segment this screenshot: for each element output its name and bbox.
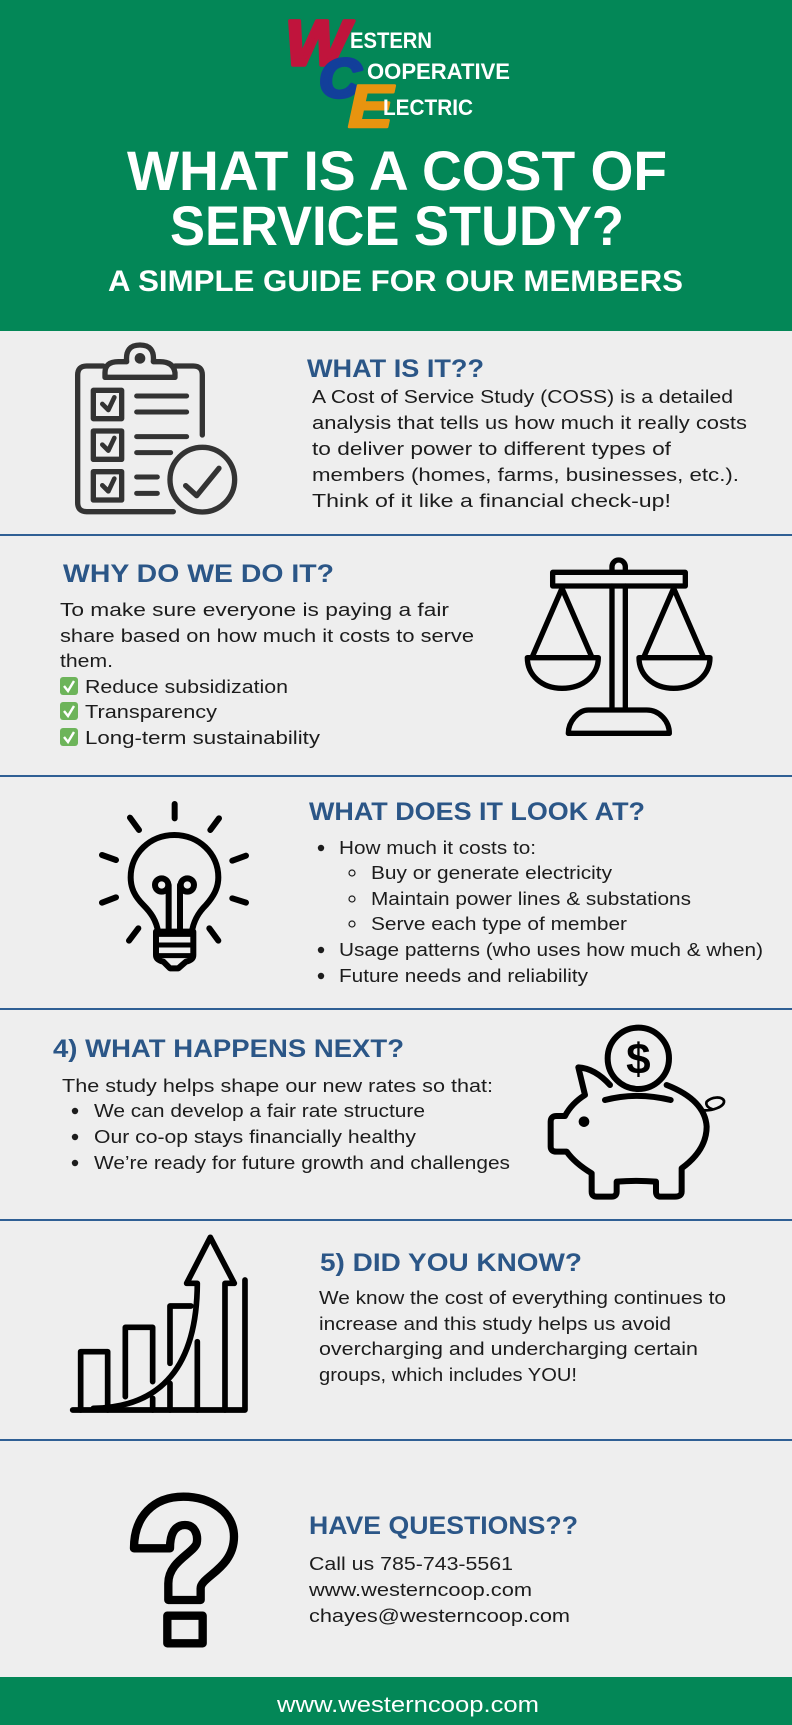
heading: WHY DO WE DO IT? — [63, 560, 334, 588]
text block: them. — [60, 650, 113, 671]
text block: A Cost of Service Study (COSS) is a detailed — [312, 386, 733, 407]
title: SERVICE STUDY? — [170, 194, 624, 257]
panel: header — [0, 0, 792, 331]
logo: Western Cooperative Electric: OOPERATIVE — [367, 59, 510, 84]
text block: We know the cost of everything continues to — [319, 1287, 726, 1308]
bullet list: How much it costs to: — [339, 837, 536, 858]
text block: overcharging and undercharging certain — [319, 1338, 698, 1359]
checklist — [60, 676, 321, 748]
text block: members (homes, farms, businesses, etc.). — [312, 464, 739, 485]
text block: groups, which includes YOU! — [319, 1364, 577, 1385]
icon: question mark — [134, 1497, 234, 1643]
text block — [60, 599, 474, 671]
subtitle: A SIMPLE GUIDE FOR OUR MEMBERS — [108, 265, 683, 298]
bullet list: We can develop a fair rate structure — [94, 1100, 425, 1121]
logo: Western Cooperative Electric: C — [319, 47, 362, 109]
bullet list: Future needs and reliability — [339, 965, 589, 986]
checklist: Transparency — [85, 701, 218, 722]
text block: To make sure everyone is paying a fair — [60, 599, 449, 620]
text block — [312, 386, 747, 511]
text block: The study helps shape our new rates so that: — [62, 1075, 493, 1096]
title: WHAT IS A COST OF — [127, 139, 667, 202]
logo: Western Cooperative Electric: LECTRIC — [383, 95, 473, 120]
logo: Western Cooperative Electric: W — [285, 7, 354, 79]
text block: to deliver power to different types of — [312, 438, 672, 459]
panel: did you know — [73, 1237, 726, 1410]
panel: why do we do it — [60, 560, 710, 748]
contact details: Call us 785-743-5561 — [309, 1553, 513, 1574]
contact details: www.westerncoop.com — [308, 1579, 532, 1600]
bullet list: Buy or generate electricity — [371, 862, 613, 883]
bullet list: Our co-op stays financially healthy — [94, 1126, 417, 1147]
panel: footer — [0, 1677, 792, 1725]
icon: rising bar chart — [73, 1237, 245, 1410]
bullet list: Serve each type of member — [371, 913, 627, 934]
checklist: Long-term sustainability — [85, 727, 321, 748]
heading: WHAT DOES IT LOOK AT? — [309, 798, 645, 826]
footer url: www.westerncoop.com — [276, 1692, 539, 1717]
bullet list: We’re ready for future growth and challenges — [94, 1152, 510, 1173]
panel: have questions — [134, 1497, 578, 1643]
icon: piggy bank — [551, 1028, 724, 1197]
icon: piggy bank: $ — [626, 1035, 651, 1084]
text block: share based on how much it costs to serve — [60, 625, 474, 646]
heading: 4) WHAT HAPPENS NEXT? — [53, 1035, 404, 1063]
panel: what is it — [78, 345, 747, 512]
title — [127, 139, 667, 257]
bullet list — [72, 1100, 510, 1173]
bullet list: Usage patterns (who uses how much & when) — [339, 939, 763, 960]
text block — [319, 1287, 726, 1385]
checklist: Reduce subsidization — [85, 676, 288, 697]
text block: analysis that tells us how much it really costs — [312, 412, 747, 433]
logo: Western Cooperative Electric: ESTERN — [350, 28, 432, 53]
logo: Western Cooperative Electric — [285, 7, 510, 140]
contact details: chayes@westerncoop.com — [309, 1605, 570, 1626]
icon: balance scale — [527, 560, 710, 733]
icon: clipboard checklist — [78, 345, 235, 512]
icon: light bulb — [102, 804, 246, 968]
panel: what does it look at — [102, 798, 763, 986]
logo: Western Cooperative Electric: E — [348, 73, 395, 140]
contact details — [308, 1553, 570, 1626]
panel: what happens next — [53, 1028, 724, 1197]
text block: increase and this study helps us avoid — [319, 1313, 671, 1334]
text block: Think of it like a financial check-up! — [312, 490, 671, 511]
bullet list — [318, 837, 763, 986]
bullet list: Maintain power lines & substations — [371, 888, 691, 909]
heading: 5) DID YOU KNOW? — [320, 1249, 582, 1277]
heading: WHAT IS IT?? — [307, 355, 484, 383]
heading: HAVE QUESTIONS?? — [309, 1512, 578, 1540]
